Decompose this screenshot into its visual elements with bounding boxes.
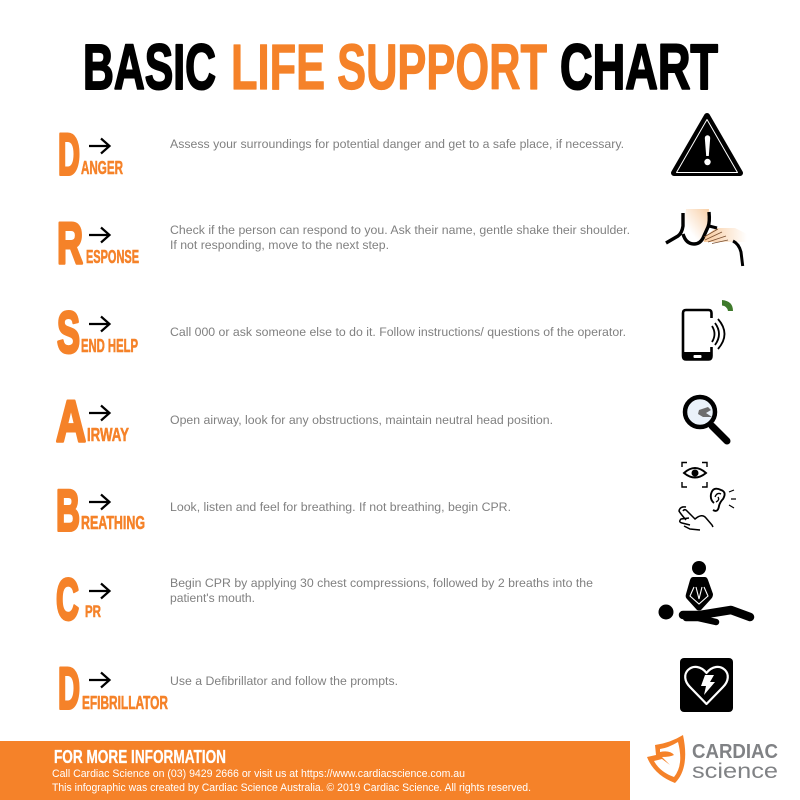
- arrow: [89, 672, 110, 688]
- row: defibrillator: [58, 656, 733, 722]
- footer banner: [0, 741, 630, 800]
- heading: Danger: D: [58, 122, 80, 188]
- row: response: [57, 209, 747, 276]
- heading: Defibrillator: D: [58, 656, 80, 722]
- description: Call 000 or ask someone else to do it. Follow instructions/ questions of the operator.: [170, 325, 626, 339]
- arrow: [89, 138, 110, 154]
- heading: Airway: A: [56, 390, 86, 454]
- arrow: [89, 494, 110, 510]
- heading: Response: R: [57, 212, 83, 276]
- row: breathing: [56, 462, 736, 544]
- description: [170, 576, 593, 605]
- description: Begin CPR by applying 30 chest compressions, followed by 2 breaths into the: [170, 576, 593, 590]
- icon: warning triangle: [674, 116, 740, 173]
- heading: Defibrillator: [58, 656, 168, 722]
- icon: hand on shoulder: [666, 209, 747, 266]
- description: If not responding, move to the next step.: [170, 238, 389, 252]
- icon: phone: [683, 300, 733, 360]
- description: [170, 223, 630, 252]
- arrow: [89, 406, 110, 420]
- heading: CPR: C: [56, 568, 79, 632]
- icon: magnifying glass: [685, 397, 727, 441]
- logo: Cardiac Science: [647, 735, 778, 783]
- description: Check if the person can respond to you. Ask their name, gentle shake their shoulder.: [170, 223, 630, 237]
- row: danger: [58, 116, 740, 188]
- logo: Cardiac Science: CARDIAC: [692, 741, 778, 763]
- heading: Breathing: B: [56, 478, 80, 544]
- footer credit line: This infographic was created by Cardiac Science Australia. © 2019 Cardiac Science. All rights reserved.: [52, 782, 531, 794]
- arrow: [89, 316, 110, 332]
- description: Open airway, look for any obstructions, maintain neutral head position.: [170, 413, 553, 427]
- icon: CPR figures: [658, 561, 750, 622]
- heading: Send help: S: [57, 300, 80, 366]
- arrow: [89, 228, 110, 242]
- title: BASIC: [83, 31, 216, 103]
- description: Assess your surroundings for potential danger and get to a safe place, if necessary.: [170, 137, 624, 151]
- icon: look, listen, feel: [679, 462, 736, 530]
- heading: Defibrillator: EFIBRILLATOR: [82, 693, 168, 713]
- logo: Cardiac Science: science: [692, 760, 778, 783]
- arrow: [89, 584, 110, 598]
- row: CPR: [56, 561, 750, 632]
- footer heading: FOR MORE INFORMATION: [54, 746, 226, 767]
- heading: Airway: [56, 390, 129, 454]
- heading: Danger: ANGER: [81, 158, 123, 178]
- description: Look, listen and feel for breathing. If not breathing, begin CPR.: [170, 500, 511, 514]
- heading: Send help: END HELP: [81, 336, 138, 356]
- icon: AED heart: [680, 658, 733, 712]
- heading: Response: ESPONSE: [86, 247, 139, 267]
- description: patient's mouth.: [170, 591, 255, 605]
- description: Use a Defibrillator and follow the prompts.: [170, 674, 398, 688]
- heading: Airway: IRWAY: [87, 425, 129, 445]
- heading: Breathing: [56, 478, 145, 544]
- row: send help: [57, 300, 733, 366]
- row: airway: [56, 390, 727, 454]
- title: LIFE SUPPORT: [231, 31, 547, 103]
- footer contact line: Call Cardiac Science on (03) 9429 2666 or visit us at https://www.cardiacscience.com.au: [52, 768, 465, 780]
- title: CHART: [560, 31, 718, 103]
- heading: Danger: [58, 122, 123, 188]
- heading: Send help: [57, 300, 138, 366]
- heading: Breathing: REATHING: [81, 513, 145, 533]
- heading: CPR: PR: [85, 602, 101, 621]
- heading: Response: [57, 212, 139, 276]
